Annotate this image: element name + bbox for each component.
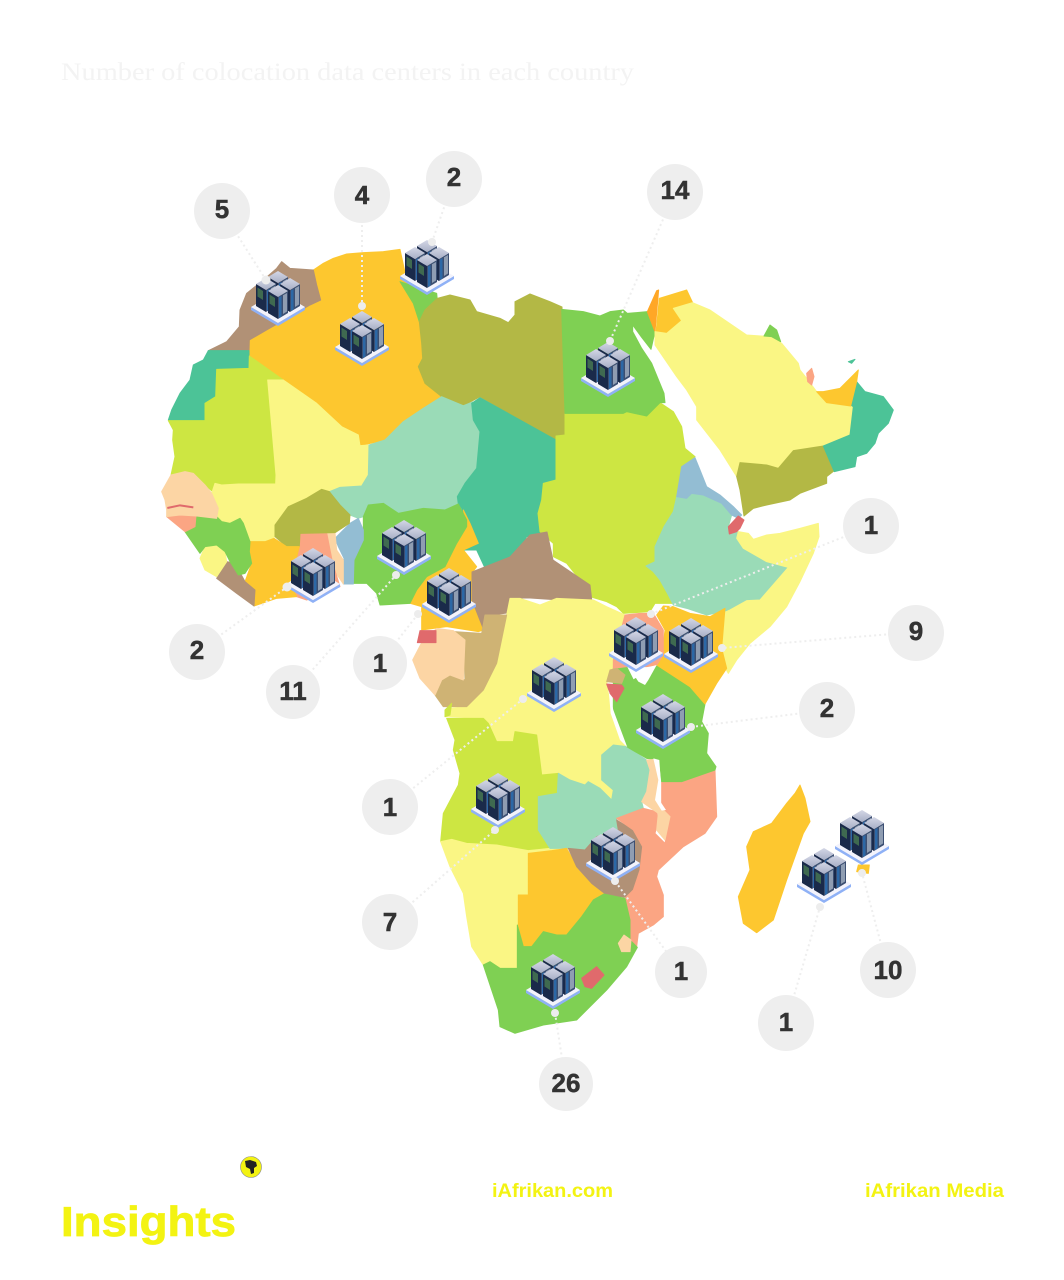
country: Eswatini bbox=[618, 935, 631, 952]
central African Republic bbox=[472, 532, 592, 628]
footer link: iAfrikan.com: iAfrikan.com bbox=[492, 1181, 613, 1202]
country: Nigeria bbox=[353, 503, 467, 605]
lake: Victoria bbox=[632, 665, 657, 685]
footer brand: Insights: Insights bbox=[61, 1198, 236, 1245]
bubble: DR Congo 1 bbox=[362, 779, 418, 835]
icon: server Morocco bbox=[251, 271, 305, 326]
bubble: Ghana 2 bbox=[169, 624, 225, 680]
country: South Africa bbox=[483, 894, 637, 1033]
country: Ethiopia bbox=[646, 493, 788, 615]
icon: server Egypt bbox=[581, 342, 635, 397]
icon: server Ghana bbox=[286, 548, 340, 603]
country: Zambia bbox=[538, 745, 650, 850]
bubble: Algeria 4: 4 bbox=[355, 180, 370, 210]
country: Yemen bbox=[737, 446, 834, 516]
country: Lesotho bbox=[582, 967, 604, 988]
western and northern Africa bbox=[162, 249, 565, 632]
north-east Africa and Arabia bbox=[538, 290, 893, 673]
country: Morocco bbox=[208, 262, 321, 351]
footer link: iAfrikan Media: iAfrikan Media bbox=[865, 1181, 1004, 1202]
icon: server Zimbabwe bbox=[586, 827, 640, 882]
country: Egypt bbox=[562, 309, 665, 416]
lake: Malawi bbox=[653, 758, 666, 811]
country: Israel bbox=[647, 290, 659, 332]
country: Namibia bbox=[441, 839, 567, 968]
country: Kenya bbox=[657, 606, 727, 704]
leader: Seychelles bbox=[786, 907, 820, 1023]
country: Qatar bbox=[807, 368, 814, 385]
country: Madagascar bbox=[738, 785, 810, 933]
country: Liberia bbox=[217, 562, 255, 606]
country: Djibouti bbox=[728, 516, 744, 534]
bubble: Angola 7 bbox=[362, 894, 418, 950]
country: Guinea-Bissau bbox=[167, 515, 196, 532]
bubble: Uganda 1 bbox=[843, 498, 899, 554]
bubble: Kenya 9: 9 bbox=[909, 616, 923, 646]
country: Sierra Leone bbox=[200, 545, 227, 577]
icon: server Algeria bbox=[335, 311, 389, 366]
country: Uganda bbox=[613, 613, 663, 668]
leader: DR Congo bbox=[390, 699, 523, 807]
bubble: Morocco 5 bbox=[194, 183, 250, 239]
country: DR Congo bbox=[445, 598, 627, 800]
country: Rwanda bbox=[607, 668, 625, 683]
country: Western Sahara bbox=[168, 351, 249, 420]
icon: server Cameroon bbox=[422, 568, 476, 623]
icon: server Tanzania bbox=[636, 694, 690, 749]
country: Equatorial Guinea bbox=[417, 631, 436, 643]
bubble: Zimbabwe 1 bbox=[655, 946, 707, 998]
bubble: Egypt 14: 14 bbox=[661, 175, 690, 205]
bubble: Tunisia 2 bbox=[426, 151, 482, 207]
icon: server Tunisia bbox=[400, 240, 454, 295]
country: Somalia bbox=[723, 523, 819, 673]
country: Libya bbox=[418, 294, 565, 440]
country: Togo bbox=[327, 533, 343, 584]
leader: Angola bbox=[390, 830, 495, 922]
leader: Ghana bbox=[197, 587, 287, 652]
country: Oman bbox=[823, 382, 893, 472]
bubble: Mauritius 10 bbox=[860, 942, 916, 998]
southern and central Africa bbox=[413, 598, 727, 1033]
bubble: Nigeria 11 bbox=[266, 665, 320, 719]
bubble: Morocco 5: 5 bbox=[215, 194, 229, 224]
country: Angola bbox=[441, 718, 558, 851]
country: UAE bbox=[817, 370, 858, 406]
leader: Tunisia bbox=[432, 179, 454, 242]
icon: server South Africa bbox=[526, 954, 580, 1009]
country: Saudi Arabia bbox=[655, 303, 853, 477]
bubble: Angola 7: 7 bbox=[383, 907, 397, 937]
lake: Tanganyika bbox=[609, 690, 627, 747]
bubble: Tunisia 2: 2 bbox=[447, 162, 461, 192]
bubble: Algeria 4 bbox=[334, 167, 390, 223]
islands bbox=[738, 785, 869, 933]
country: Congo bbox=[435, 615, 507, 707]
country: Jordan bbox=[656, 290, 693, 333]
country: Sudan bbox=[538, 403, 695, 613]
country: Ivory Coast bbox=[245, 538, 299, 606]
country: Kuwait bbox=[764, 325, 781, 342]
icon: server Uganda bbox=[609, 617, 663, 672]
bubble: South Africa 26 bbox=[539, 1057, 593, 1111]
bubble: Tanzania 2 bbox=[799, 682, 855, 738]
title: Number of colocation data centers in each country bbox=[61, 59, 635, 86]
leader: Nigeria bbox=[293, 575, 396, 692]
logo: Africa badge bbox=[240, 1156, 262, 1178]
country: Burundi bbox=[607, 684, 624, 702]
bubble: Kenya 9 bbox=[888, 605, 944, 661]
country: Guinea bbox=[185, 517, 252, 575]
country: Mauritius bbox=[857, 865, 869, 873]
icon: server Angola bbox=[471, 773, 525, 828]
leader: Cameroon bbox=[380, 614, 418, 663]
map of Africa and Arabia bbox=[162, 249, 893, 1033]
icon: server Nigeria bbox=[377, 520, 431, 575]
leader: Egypt bbox=[610, 192, 675, 341]
icon: server DR Congo bbox=[527, 657, 581, 712]
country: Gabon bbox=[413, 628, 465, 695]
leader end dots bbox=[262, 238, 866, 1017]
country: Eritrea bbox=[677, 458, 742, 518]
bubble: Zimbabwe 1: 1 bbox=[674, 956, 688, 986]
country: Senegal bbox=[162, 472, 218, 518]
country: Tanzania bbox=[613, 665, 716, 782]
bubble: DR Congo 1: 1 bbox=[383, 792, 397, 822]
country: Burkina Faso bbox=[275, 489, 350, 547]
exclave: Cabinda bbox=[445, 703, 452, 717]
bubble: Nigeria 11: 11 bbox=[279, 676, 307, 706]
server icons bbox=[251, 240, 889, 1009]
country: Ghana bbox=[290, 533, 340, 600]
bubble: Mauritius 10: 10 bbox=[874, 955, 902, 985]
leader: Kenya bbox=[722, 632, 916, 648]
bubble: Ghana 2: 2 bbox=[190, 635, 204, 665]
country: Mali bbox=[212, 380, 369, 542]
country: Niger bbox=[329, 397, 480, 518]
country: Mauritania bbox=[168, 356, 283, 492]
bubble: Cameroon 1 bbox=[353, 636, 407, 690]
country: Cameroon bbox=[410, 510, 483, 632]
icon: server Seychelles bbox=[797, 848, 851, 903]
country: Tunisia bbox=[400, 282, 437, 322]
country: Botswana bbox=[518, 848, 604, 947]
country: Gambia bbox=[167, 505, 193, 508]
icon: server Kenya bbox=[664, 618, 718, 673]
country: Chad bbox=[457, 398, 556, 572]
count bubbles bbox=[169, 151, 944, 1111]
island: Persian Gulf islet bbox=[848, 359, 855, 363]
icon: server Mauritius bbox=[835, 810, 889, 865]
country: Benin bbox=[335, 518, 363, 584]
bubble: Tanzania 2: 2 bbox=[820, 693, 834, 723]
bubble: Seychelles 1: 1 bbox=[779, 1007, 793, 1037]
bubble: South Africa 26: 26 bbox=[552, 1068, 580, 1098]
leader: South Africa bbox=[555, 1013, 566, 1084]
bubble: Cameroon 1: 1 bbox=[373, 648, 387, 678]
leader: Tanzania bbox=[691, 710, 827, 727]
leader: Morocco bbox=[222, 211, 266, 280]
country: Zimbabwe bbox=[568, 820, 643, 897]
bubble: Uganda 1: 1 bbox=[864, 510, 878, 540]
bubble: Seychelles 1 bbox=[758, 995, 814, 1051]
bubble: Egypt 14 bbox=[647, 164, 703, 220]
country: Malawi bbox=[642, 759, 670, 840]
leader: Zimbabwe bbox=[615, 881, 681, 972]
leader: Uganda bbox=[651, 526, 871, 614]
country: Mozambique bbox=[617, 770, 717, 947]
leader: Algeria bbox=[361, 195, 363, 306]
leader: Mauritius bbox=[862, 873, 888, 970]
dotted leader lines bbox=[197, 179, 916, 1084]
country: Algeria bbox=[249, 249, 442, 446]
